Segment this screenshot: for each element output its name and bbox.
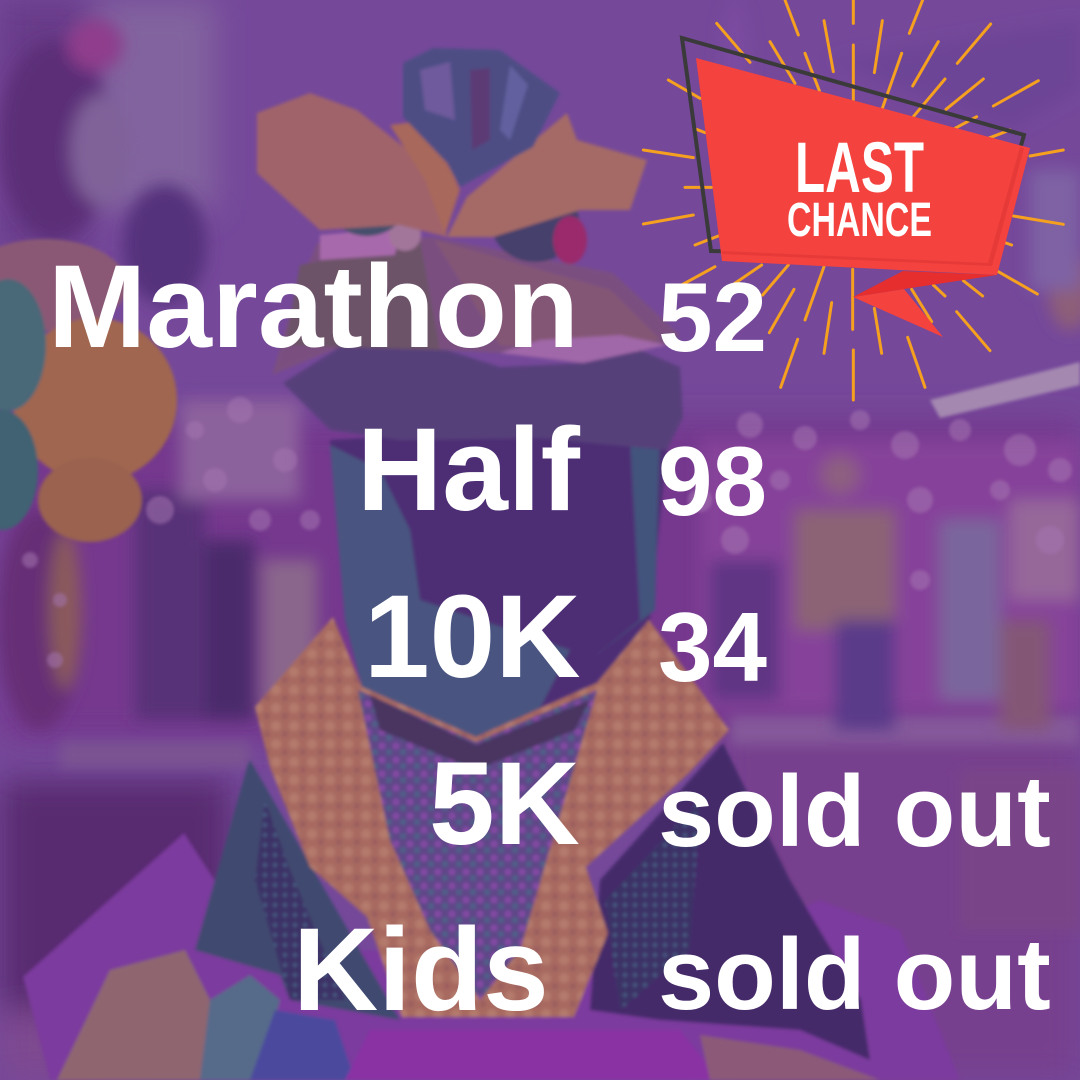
eyes — [329, 174, 405, 236]
hat — [403, 48, 560, 187]
tickets left: Kids: sold out — [658, 919, 1051, 1031]
race label: 10K: 10K — [364, 571, 580, 703]
badge dark outline — [682, 38, 1024, 255]
tutu — [23, 833, 960, 1080]
race label: Half: Half — [357, 404, 580, 536]
crowd — [0, 0, 1080, 730]
tickets left: Half: 98 — [658, 426, 767, 536]
head — [272, 237, 680, 375]
lower jaw — [283, 347, 683, 450]
tickets left: Marathon: 52 — [658, 262, 767, 372]
race label: Kids: Kids — [293, 904, 549, 1036]
ribbon tail — [853, 289, 943, 337]
badge: last chance: CHANCE — [787, 194, 932, 247]
race label: Marathon: Marathon — [48, 241, 579, 373]
tickets left: 5K: sold out — [658, 756, 1051, 868]
street bands — [60, 715, 1080, 930]
balloons — [0, 239, 177, 542]
badge red banner — [696, 58, 1030, 275]
body — [195, 760, 400, 1020]
collar — [255, 617, 729, 1017]
tickets left: 10K: 34 — [658, 592, 767, 702]
bead strands — [358, 690, 597, 1000]
badge text: LAST — [795, 129, 924, 208]
bead garland at right — [930, 362, 1080, 418]
neck — [330, 420, 670, 737]
crowd bokeh dots — [22, 397, 1072, 668]
race label: 5K: 5K — [429, 738, 580, 870]
feathers — [257, 93, 447, 237]
